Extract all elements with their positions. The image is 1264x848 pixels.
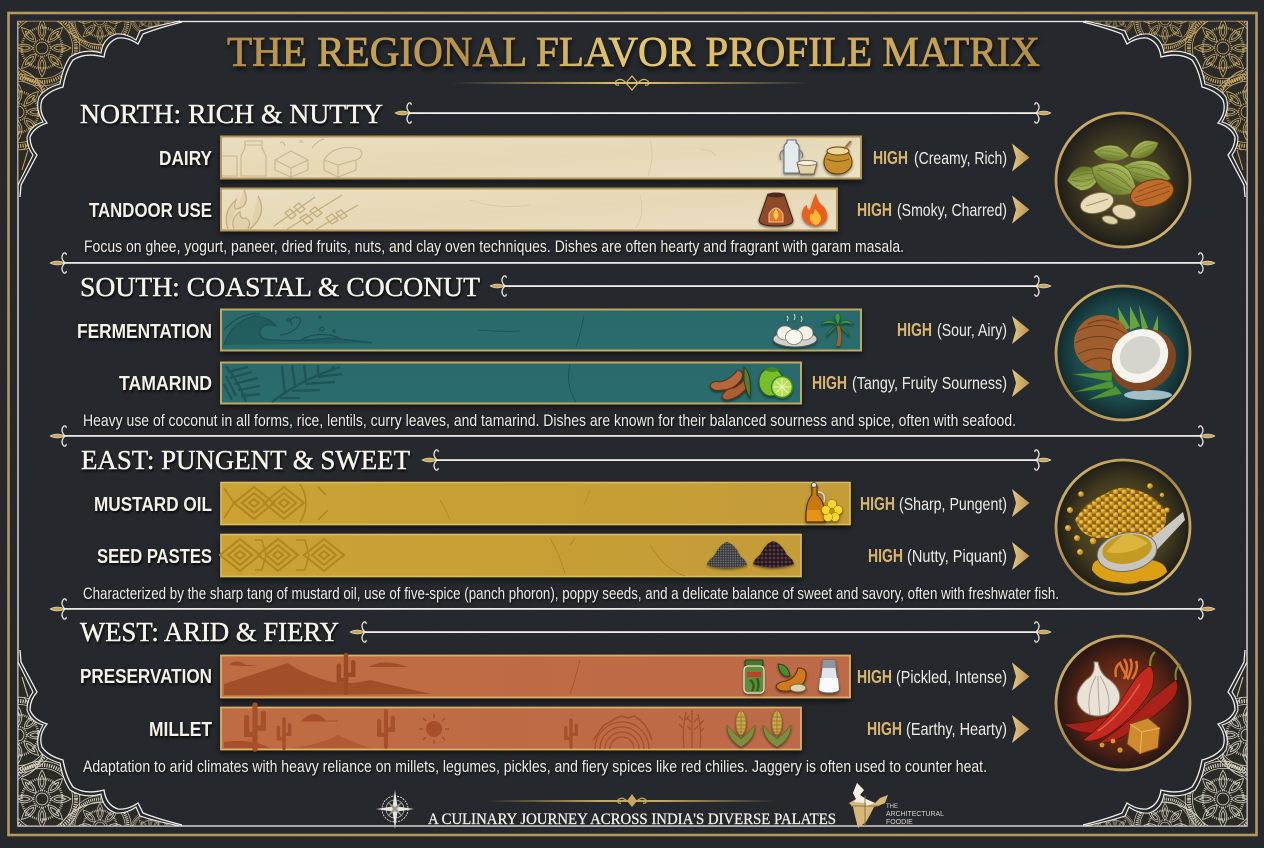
icon: pickled vegetable bbox=[776, 664, 806, 692]
medallion: garlic, chilies and jaggery bbox=[1056, 636, 1190, 770]
icon: oil bottle bbox=[806, 482, 825, 522]
title divider bbox=[451, 76, 811, 90]
icon: corn stalk bbox=[763, 711, 791, 747]
logo text: ARCHITECTURAL bbox=[886, 811, 944, 818]
bar: tandoor use bbox=[221, 188, 837, 230]
corner ornament: top left bbox=[0, 0, 188, 201]
rating: mustard oil: (Sharp, Pungent) bbox=[899, 494, 1007, 514]
row label: millet: MILLET bbox=[149, 719, 212, 741]
bar: dairy bbox=[221, 136, 861, 178]
icon: milk can and bowl bbox=[780, 140, 817, 174]
bar cracks bbox=[568, 364, 576, 402]
panel: west bbox=[80, 617, 1190, 776]
icon: flame bbox=[802, 193, 827, 226]
icon: lime bbox=[759, 367, 792, 398]
rating: millet: (Earthy, Hearty) bbox=[906, 719, 1007, 739]
bar motif: palm leaves bbox=[224, 365, 342, 402]
rating: preservation: (Pickled, Intense) bbox=[896, 667, 1007, 687]
panel: south bbox=[77, 272, 1190, 430]
icon: salt shaker bbox=[819, 660, 839, 693]
rating: millet: HIGH bbox=[867, 719, 902, 739]
rating: tandoor bbox=[857, 200, 1007, 220]
bar motif: wheat bbox=[679, 710, 704, 748]
divider bbox=[50, 599, 1215, 619]
bar cracks bbox=[478, 316, 584, 347]
rating: fermentation: HIGH bbox=[897, 320, 932, 340]
bar cracks bbox=[470, 195, 642, 228]
corner ornament: bottom left bbox=[0, 646, 188, 848]
bar motif: woven diamonds bbox=[220, 539, 344, 571]
logo text bbox=[886, 804, 944, 826]
rating: fermentation bbox=[897, 320, 1007, 340]
bar cracks bbox=[648, 140, 716, 176]
arrow bbox=[1012, 715, 1030, 743]
bar motif: desert dunes bbox=[224, 662, 432, 695]
bar: seed pastes bbox=[220, 534, 801, 576]
heading rule: east bbox=[422, 450, 1051, 470]
footer bbox=[376, 783, 944, 829]
row label: mustard oil: MUSTARD OIL bbox=[94, 494, 212, 516]
rating: tandoor: (Smoky, Charred) bbox=[897, 200, 1007, 220]
row label: seed pastes: SEED PASTES bbox=[97, 546, 212, 568]
icon: idli plate bbox=[773, 314, 817, 347]
row label: preservation: PRESERVATION bbox=[80, 666, 212, 688]
icon: pickle jar bbox=[744, 660, 764, 693]
heading: west: WEST: ARID & FIERY bbox=[80, 617, 339, 647]
bar motif: dairy line art bbox=[222, 139, 362, 177]
bar: fermentation bbox=[221, 310, 861, 350]
panel: north bbox=[80, 99, 1190, 256]
bar: tamarind bbox=[221, 362, 801, 404]
divider bbox=[50, 253, 1215, 273]
icon: map of India bbox=[849, 783, 888, 828]
bar cracks bbox=[550, 538, 685, 576]
footer tagline: A CULINARY JOURNEY ACROSS INDIA'S DIVERSE PALATES bbox=[428, 811, 836, 828]
bar motif: half mandala bbox=[593, 716, 652, 749]
medallion: coconut bbox=[1056, 286, 1190, 420]
medallion: cardamom and almonds bbox=[1056, 113, 1190, 247]
bar motif: flame and skewers bbox=[226, 190, 358, 230]
icon: mustard flower bbox=[822, 500, 842, 522]
rating: mustard oil bbox=[860, 494, 1007, 514]
heading rule: south bbox=[490, 276, 1051, 296]
icon: black seed heap bbox=[707, 542, 747, 568]
bar cracks bbox=[440, 490, 590, 520]
icon: palm tree bbox=[821, 313, 854, 346]
rating: tamarind bbox=[812, 373, 1007, 393]
row label: fermentation: FERMENTATION bbox=[77, 321, 212, 343]
rating: tandoor: HIGH bbox=[857, 200, 892, 220]
row label: tandoor use: TANDOOR USE bbox=[89, 200, 212, 222]
icon: tamarind pods bbox=[710, 367, 750, 400]
description: north: Focus on ghee, yogurt, paneer, dried fruits, nuts, and clay oven techniques. Dishes are often hearty and fragrant with garam masala. bbox=[84, 238, 904, 256]
arrow bbox=[1012, 542, 1030, 570]
row label: dairy: DAIRY bbox=[159, 148, 213, 170]
heading: north: NORTH: RICH & NUTTY bbox=[80, 99, 383, 129]
arrow bbox=[1012, 662, 1030, 690]
rating: preservation: HIGH bbox=[857, 667, 892, 687]
logo text: THE bbox=[886, 804, 898, 810]
heading: south: SOUTH: COASTAL & COCONUT bbox=[80, 272, 481, 302]
arrow bbox=[1012, 196, 1030, 224]
icon: compass rose bbox=[376, 790, 414, 829]
rating: seed pastes: HIGH bbox=[868, 546, 903, 566]
rating: seed pastes bbox=[868, 546, 1007, 566]
bar motif: wave bbox=[224, 314, 372, 345]
bar motif: desert cacti and sun bbox=[224, 705, 576, 749]
rating: millet bbox=[867, 719, 1007, 739]
description: south: Heavy use of coconut in all forms, rice, lentils, curry leaves, and tamarind. Dishes are known for their balanced sourness and spice, often with seafood. bbox=[83, 412, 1016, 430]
icon: millet stalk bbox=[727, 711, 755, 747]
divider bbox=[50, 426, 1215, 446]
arrow bbox=[1012, 489, 1030, 517]
heading: east: EAST: PUNGENT & SWEET bbox=[81, 445, 410, 475]
arrow bbox=[1012, 369, 1030, 397]
bar: mustard oil bbox=[221, 482, 850, 524]
corner ornament: top right bbox=[1077, 0, 1264, 201]
description: west: Adaptation to arid climates with heavy reliance on millets, legumes, pickles, and fiery spices like red chilies. Jaggery is often used to counter heat. bbox=[83, 758, 987, 776]
rating: seed pastes: (Nutty, Piquant) bbox=[907, 546, 1007, 566]
heading rule: north bbox=[395, 103, 1051, 123]
icon: poppy seed heap bbox=[753, 541, 794, 568]
heading rule: west bbox=[350, 622, 1051, 642]
arrow bbox=[1012, 316, 1030, 344]
rating: dairy: (Creamy, Rich) bbox=[914, 148, 1007, 168]
corner ornament: bottom right bbox=[1077, 646, 1264, 848]
rating: fermentation: (Sour, Airy) bbox=[937, 320, 1007, 340]
rating: tamarind: (Tangy, Fruity Sourness) bbox=[852, 373, 1007, 393]
medallion: mustard seeds and spoon bbox=[1056, 460, 1190, 594]
panel: east bbox=[81, 445, 1190, 603]
logo text: FOODIE bbox=[886, 819, 913, 826]
rating: dairy bbox=[873, 148, 1007, 168]
title: THE REGIONAL FLAVOR PROFILE MATRIX bbox=[227, 30, 1040, 76]
rating: dairy: HIGH bbox=[873, 148, 908, 168]
icon: ghee pot bbox=[824, 141, 852, 174]
rating: mustard oil: HIGH bbox=[860, 494, 895, 514]
bar: millet bbox=[221, 705, 801, 750]
rating: preservation bbox=[857, 667, 1007, 687]
bar motif: diamonds bbox=[224, 484, 328, 522]
bar cracks bbox=[570, 660, 580, 694]
arrow bbox=[1012, 144, 1030, 172]
row label: tamarind: TAMARIND bbox=[119, 373, 212, 395]
icon: clay tandoor bbox=[759, 192, 793, 226]
description: east: Characterized by the sharp tang of mustard oil, use of five-spice (panch phoron), poppy seeds, and a delicate balance of sweet and savory, often with freshwater fish. bbox=[83, 585, 1059, 603]
rating: tamarind: HIGH bbox=[812, 373, 847, 393]
bar: preservation bbox=[221, 655, 850, 698]
footer divider bbox=[486, 794, 777, 807]
